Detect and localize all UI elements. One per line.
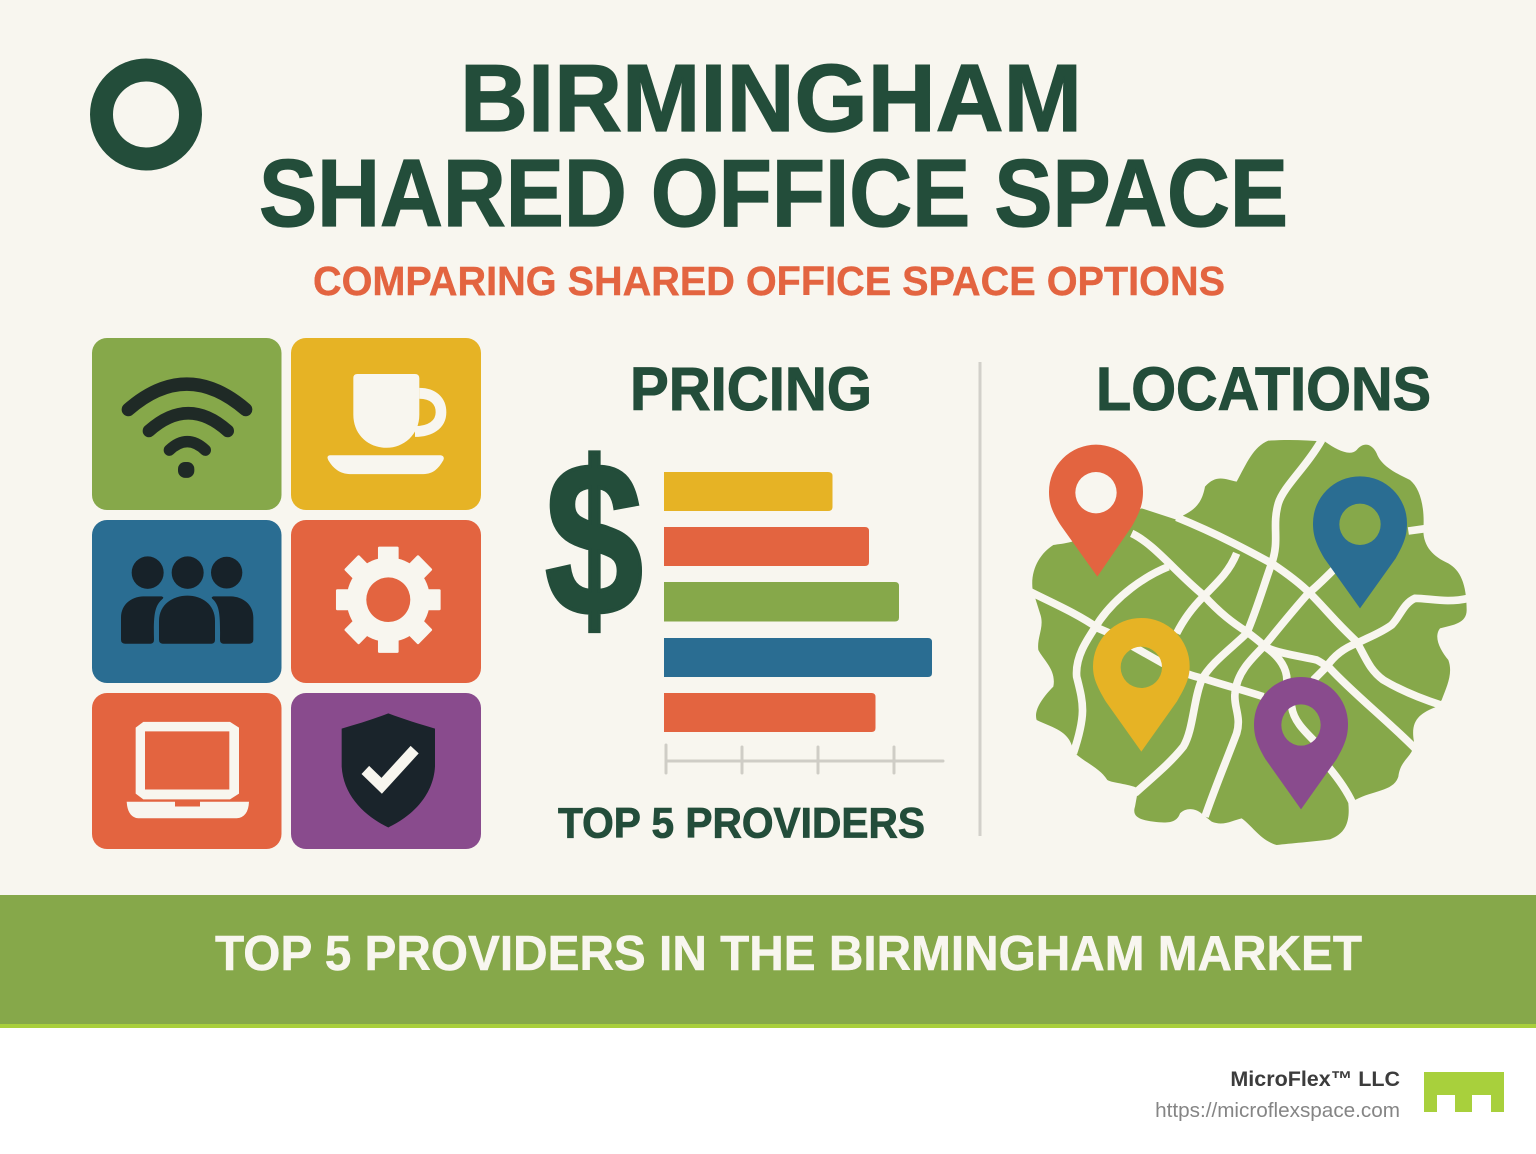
icon: dollar sign: $ xyxy=(545,418,643,662)
icon: security shield tile xyxy=(291,693,481,849)
footer: company name and url xyxy=(1155,1067,1400,1122)
title xyxy=(259,45,1288,247)
pin: orange xyxy=(1049,445,1143,577)
pin: blue xyxy=(1313,476,1407,608)
pin: yellow xyxy=(1093,618,1190,752)
footer: company name and url: https://microflexspace.com xyxy=(1155,1099,1400,1122)
icon: gear tile xyxy=(291,520,481,683)
footer: company name and url: MicroFlex™ LLC xyxy=(1230,1067,1400,1091)
panel: amenity icons xyxy=(92,338,481,849)
icon: coffee cup tile xyxy=(291,338,481,510)
icon: wifi tile xyxy=(92,338,282,510)
heading: pricing: PRICING xyxy=(630,355,872,423)
pin: purple xyxy=(1254,677,1348,809)
caption: top 5 providers: TOP 5 PROVIDERS xyxy=(558,800,925,848)
banner: top 5 providers xyxy=(0,895,1536,1028)
icon: ring logo xyxy=(102,70,190,159)
icon: MicroFlex logo xyxy=(1424,1072,1504,1112)
heading: locations: LOCATIONS xyxy=(1096,355,1431,423)
map with location pins xyxy=(1030,440,1468,845)
bar chart: pricing xyxy=(664,472,943,773)
title: BIRMINGHAM xyxy=(460,45,1082,152)
icon: team tile xyxy=(92,520,282,683)
map: city outline and roads xyxy=(1030,440,1468,845)
banner: top 5 providers: TOP 5 PROVIDERS IN THE BIRMINGHAM MARKET xyxy=(215,927,1362,981)
subtitle: COMPARING SHARED OFFICE SPACE OPTIONS xyxy=(313,258,1225,304)
icon: laptop tile xyxy=(92,693,282,849)
title: SHARED OFFICE SPACE xyxy=(259,140,1288,247)
